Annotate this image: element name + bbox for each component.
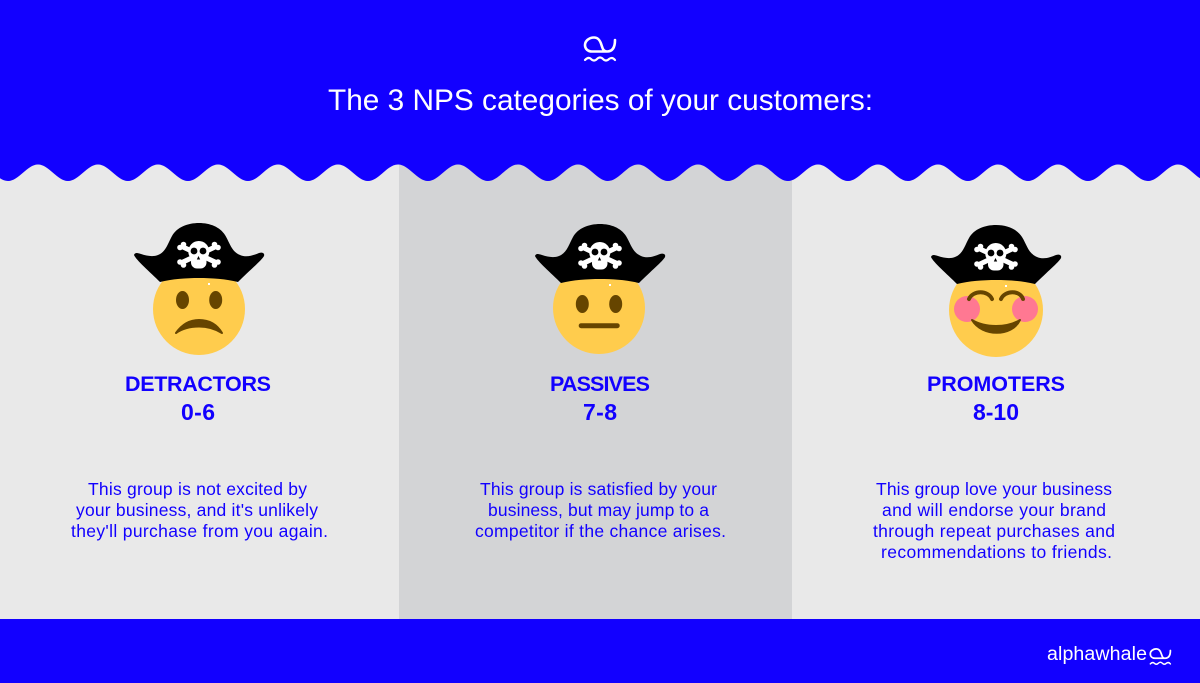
panel: passives — [399, 150, 792, 619]
text: passives description: competitor if the chance arises. — [475, 521, 726, 541]
text: promoters description: This group love your business — [876, 479, 1112, 499]
text: passives description — [475, 479, 726, 541]
text: detractors description: This group is not excited by — [88, 479, 307, 499]
panel: detractors — [0, 150, 399, 619]
heading: promoters: 8-10 — [973, 399, 1019, 425]
text: promoters description: recommendations to friends. — [881, 542, 1112, 562]
heading: promoters: PROMOTERS — [927, 372, 1065, 396]
text: passives description: This group is satisfied by your — [480, 479, 717, 499]
heading: detractors: DETRACTORS — [125, 372, 271, 396]
footer logo: alphawhale — [1047, 643, 1147, 665]
icon: alphawhale logo mark — [585, 38, 615, 60]
text: promoters description: through repeat purchases and — [873, 521, 1115, 541]
panel: promoters — [792, 150, 1200, 619]
text: detractors description: your business, and it's unlikely — [76, 500, 318, 520]
title: The 3 NPS categories of your customers: — [328, 84, 873, 117]
icon: sad pirate emoji — [134, 223, 264, 355]
header band with wavy edge — [0, 0, 1200, 181]
icon: neutral pirate emoji — [535, 224, 665, 354]
heading: passives: 7-8 — [583, 399, 617, 425]
heading: detractors: 0-6 — [181, 399, 215, 425]
icon: smiling pirate emoji — [931, 225, 1061, 357]
footer band — [0, 619, 1200, 683]
heading: promoters — [927, 372, 1065, 425]
text: promoters description: and will endorse your brand — [882, 500, 1106, 520]
heading: passives — [550, 372, 650, 425]
heading: detractors — [125, 372, 271, 425]
text: promoters description — [873, 479, 1115, 562]
heading: passives: PASSIVES — [550, 372, 650, 396]
text: detractors description — [71, 479, 328, 541]
text: passives description: business, but may jump to a — [488, 500, 709, 520]
text: detractors description: they'll purchase from you again. — [71, 521, 328, 541]
